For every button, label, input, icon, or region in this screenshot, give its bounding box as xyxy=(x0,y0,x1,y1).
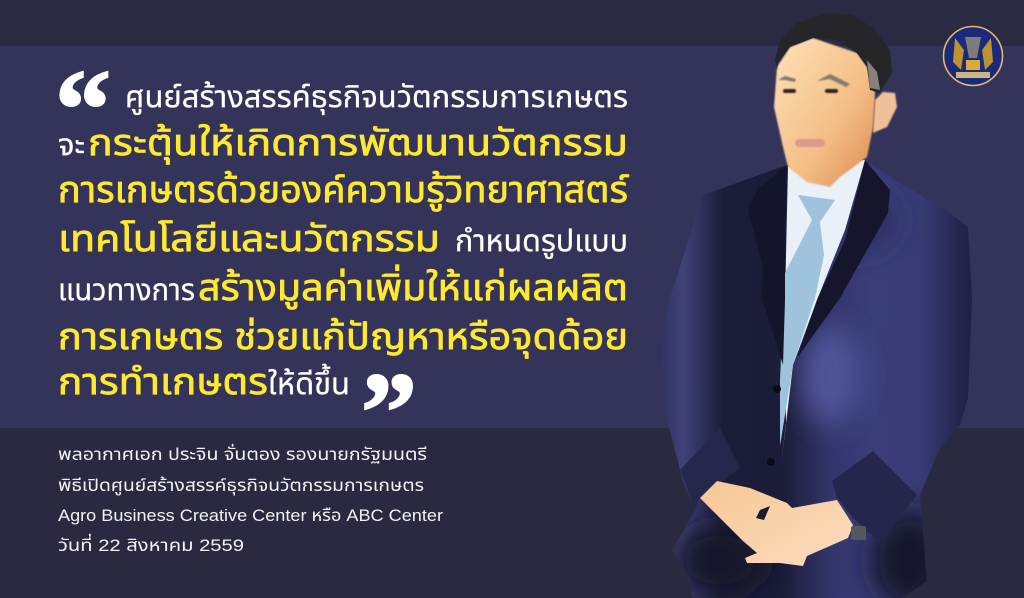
left sleeve cuff xyxy=(680,428,740,510)
quote line 4 xyxy=(58,218,628,259)
quote line 5: แนวทางการ xyxy=(58,274,195,307)
quote line 6: การเกษตร ช่วยแก้ปัญหาหรือจุดด้อย xyxy=(58,316,628,359)
jacket buttons xyxy=(767,385,781,466)
left lapel xyxy=(748,165,787,365)
attribution xyxy=(58,443,443,555)
opening quotation mark: “ xyxy=(55,48,111,172)
shirt xyxy=(781,160,865,465)
quote line 4: เทคโนโลยีและนวัตกรรม xyxy=(58,218,440,259)
right lapel xyxy=(797,160,890,358)
suit jacket xyxy=(650,150,980,598)
quote line 5: สร้างมูลค่าเพิ่มให้แก่ผลผลิต xyxy=(198,264,628,310)
right sleeve cuff xyxy=(832,451,917,543)
portrait of the deputy prime minister xyxy=(650,13,980,598)
ear xyxy=(873,92,897,133)
quote line 7: การทำเกษตร xyxy=(58,361,268,402)
attribution line 1: พลอากาศเอก ประจิน จั่นตอง รองนายกรัฐมนตรี xyxy=(58,443,427,464)
quote line 2: กระตุ้นให้เกิดการพัฒนานวัตกรรม xyxy=(88,122,628,165)
attribution line 2: พิธีเปิดศูนย์สร้างสรรค์ธุรกิจนวัตกรรมการเกษตร xyxy=(58,475,424,497)
jacket highlights and shadows xyxy=(675,190,950,598)
quote line 4: กำหนดรูปแบบ xyxy=(455,225,628,259)
grey temple xyxy=(867,60,880,90)
quote line 1: ศูนย์สร้างสรรค์ธุรกิจนวัตกรรมการเกษตร xyxy=(125,81,628,115)
government seal xyxy=(944,26,1002,86)
quote line 3: การเกษตรด้วยองค์ความรู้วิทยาศาสตร์ xyxy=(58,169,629,212)
quote line 2: จะ xyxy=(58,129,85,162)
attribution line 3: Agro Business Creative Center หรือ ABC Center xyxy=(58,506,443,525)
tie xyxy=(780,195,835,446)
finger gap xyxy=(756,506,770,520)
hands xyxy=(700,481,853,566)
quote line 7 xyxy=(58,361,350,402)
quote line 7: ให้ดีขึ้น xyxy=(268,363,350,401)
hair xyxy=(775,13,892,93)
watch xyxy=(851,526,866,540)
quote line 5 xyxy=(58,264,628,310)
quote text xyxy=(58,81,629,402)
face and neck xyxy=(774,38,875,187)
closing quotation mark: ” xyxy=(361,351,417,475)
attribution line 4: วันที่ 22 สิงหาคม 2559 xyxy=(58,533,244,555)
eyes brows and mouth xyxy=(778,74,850,147)
